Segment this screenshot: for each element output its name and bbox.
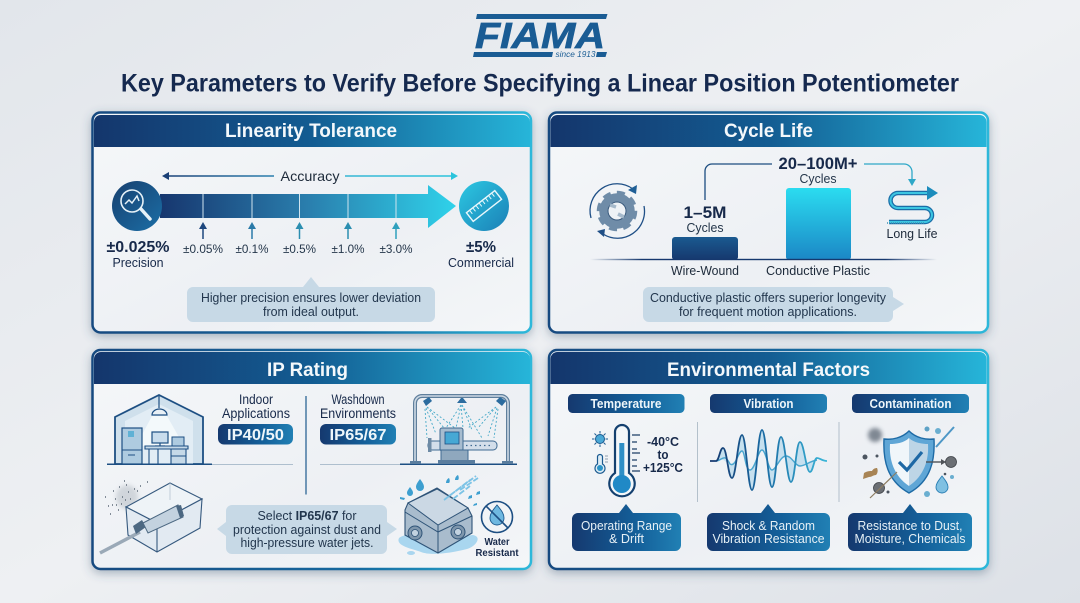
icon: long life serpentine arrow <box>887 186 938 223</box>
heading: environmental factors: Environmental Factors <box>667 359 870 381</box>
label: commercial <box>448 239 514 270</box>
title: Key Parameters to Verify Before Specifying a Linear Position Potentiometer <box>121 70 959 98</box>
callout: higher precision: from ideal output. <box>263 305 359 319</box>
text: indoor applications <box>222 392 290 421</box>
bar chart: cycle life: 1–5M <box>684 204 726 222</box>
icon: magnifier precision <box>112 181 162 231</box>
column heading: contamination: Contamination <box>870 397 952 411</box>
callout: select IP65/67: protection against dust and <box>233 523 381 537</box>
callout: resistance: Moisture, Chemicals <box>854 532 966 546</box>
tick arrows and values: ±0.05% <box>183 242 223 256</box>
label: commercial: ±5% <box>466 239 496 256</box>
ground line left <box>107 463 212 465</box>
text: temperature range <box>643 435 683 475</box>
callout: operating range: Operating Range <box>581 519 672 533</box>
tick arrows and values: ±0.5% <box>283 242 316 256</box>
callout: higher precision: Higher precision ensures lower deviation <box>201 291 421 305</box>
tick arrows and values <box>183 222 413 256</box>
tick arrows and values: ±1.0% <box>332 242 365 256</box>
callout: select IP65/67: high-pressure water jets. <box>240 536 374 550</box>
callout: shock and vibration: Vibration Resistance <box>712 532 825 546</box>
callout: conductive plastic: Conductive plastic offers superior longevity <box>650 291 887 305</box>
callout: select IP65/67 <box>217 505 397 554</box>
gradient scale arrow <box>160 185 456 228</box>
icon: gear with cycle arrows <box>590 184 645 238</box>
label: water resistant <box>476 536 519 559</box>
icon: small thermometer <box>595 454 608 473</box>
bar chart: cycle life: Conductive Plastic <box>766 264 870 278</box>
column heading: vibration <box>710 394 827 413</box>
icon: indoor room <box>115 395 203 464</box>
icon: shield and contaminants <box>862 426 956 498</box>
icon: washdown machine <box>400 396 517 464</box>
label: water resistant: Resistant <box>476 547 519 559</box>
tick arrows and values: ±3.0% <box>380 242 413 256</box>
callout: resistance: Resistance to Dust, <box>858 519 962 533</box>
text: indoor applications: Applications <box>222 406 290 421</box>
label: commercial: Commercial <box>448 256 514 270</box>
callout: shock and vibration: Shock & Random <box>722 519 815 533</box>
label: precision <box>106 239 170 270</box>
label: precision: ±0.025% <box>106 239 170 256</box>
icon: sun <box>592 431 608 447</box>
callout: resistance <box>848 504 972 551</box>
callout: operating range <box>572 504 681 551</box>
tick arrows and values: ±0.1% <box>236 242 269 256</box>
icon: junction box with water <box>398 475 480 555</box>
column heading: contamination <box>852 394 969 413</box>
icon: thermometer <box>609 425 640 496</box>
heading: linearity tolerance: Linearity Tolerance <box>225 120 397 142</box>
panel: cycle life <box>549 112 988 332</box>
chart: vibration wave <box>710 430 827 490</box>
column heading: vibration: Vibration <box>744 397 794 411</box>
callout: higher precision <box>187 277 435 322</box>
accuracy arrows <box>162 168 458 184</box>
logo: FIAMA: FIAMA <box>475 15 605 56</box>
text: temperature range: +125°C <box>643 461 683 475</box>
accuracy arrows: Accuracy <box>280 168 340 184</box>
column heading: temperature <box>568 394 684 413</box>
text: washdown environments <box>320 392 396 421</box>
bar chart: cycle life: 20–100M+ <box>778 155 858 173</box>
heading: cycle life: Cycle Life <box>724 120 813 142</box>
panel: IP rating <box>92 350 531 569</box>
bar chart: cycle life: Cycles <box>800 172 836 186</box>
text: indoor applications: Indoor <box>239 392 273 407</box>
label: precision: Precision <box>112 256 164 270</box>
callout: select IP65/67: Select IP65/67 for <box>258 509 356 523</box>
panel: environmental factors <box>549 350 988 569</box>
text: temperature range: to <box>658 448 669 462</box>
label: long life: Long Life <box>886 227 938 241</box>
badge: IP40/50: IP40/50 <box>227 427 284 444</box>
callout: conductive plastic <box>643 287 904 322</box>
badge: IP65/67 <box>320 424 396 444</box>
column heading: temperature: Temperature <box>590 397 662 411</box>
callout: operating range: & Drift <box>609 532 645 546</box>
heading: IP rating: IP Rating <box>267 359 348 381</box>
text: washdown environments: Washdown <box>332 392 384 407</box>
text: temperature range: -40°C <box>647 435 679 449</box>
callout: conductive plastic: for frequent motion applications. <box>679 305 857 319</box>
badge: IP65/67: IP65/67 <box>330 427 386 444</box>
bar chart: cycle life <box>590 155 937 278</box>
bar chart: cycle life: Wire-Wound <box>671 264 739 278</box>
text: washdown environments: Environments <box>320 406 396 421</box>
panel: linearity tolerance <box>92 112 531 332</box>
icon: no water <box>482 502 512 532</box>
connector arrow to long life <box>705 164 916 200</box>
icon: ruler commercial <box>459 181 509 231</box>
icon: sealed sensor box <box>100 481 202 553</box>
label: water resistant: Water <box>484 536 510 548</box>
logo: FIAMA: since 1913 <box>556 49 596 59</box>
callout: shock and vibration <box>707 504 830 551</box>
bar chart: cycle life: Cycles <box>686 221 724 235</box>
badge: IP40/50 <box>218 424 293 444</box>
